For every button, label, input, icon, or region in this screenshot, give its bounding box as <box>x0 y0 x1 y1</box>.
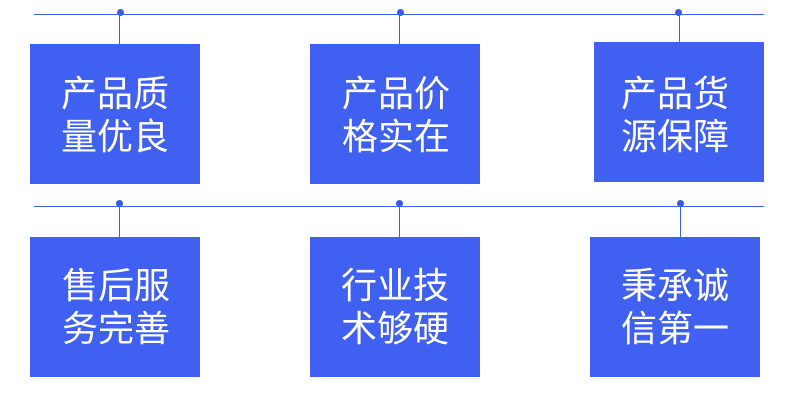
card: supply guarantee <box>594 42 764 182</box>
node: bottom left <box>116 200 123 237</box>
card: integrity first <box>590 237 760 377</box>
card: after-sales service <box>30 237 200 377</box>
node: top right <box>675 9 682 42</box>
card: industry technology <box>310 237 480 377</box>
card: supply guarantee: 产品货 <box>621 73 729 114</box>
card: integrity first: 信第一 <box>621 308 729 349</box>
node: bottom right <box>677 200 684 237</box>
card: supply guarantee: 源保障 <box>621 116 729 157</box>
timeline: bottom row <box>34 206 764 207</box>
node: bottom middle <box>396 200 403 237</box>
card: after-sales service: 务完善 <box>62 308 170 349</box>
card: industry technology: 术够硬 <box>341 308 449 349</box>
node: top left <box>117 9 124 44</box>
card: integrity first: 秉承诚 <box>621 265 729 306</box>
card: product quality: 产品质 <box>61 73 169 114</box>
card: fair price: 产品价 <box>342 73 450 114</box>
card: product quality: 量优良 <box>61 116 169 157</box>
card: after-sales service: 售后服 <box>62 265 170 306</box>
card: industry technology: 行业技 <box>341 265 449 306</box>
node: top middle <box>397 9 404 44</box>
timeline: top row <box>34 14 764 15</box>
card: fair price <box>310 44 480 184</box>
card: product quality <box>30 44 200 184</box>
card: fair price: 格实在 <box>342 116 450 157</box>
